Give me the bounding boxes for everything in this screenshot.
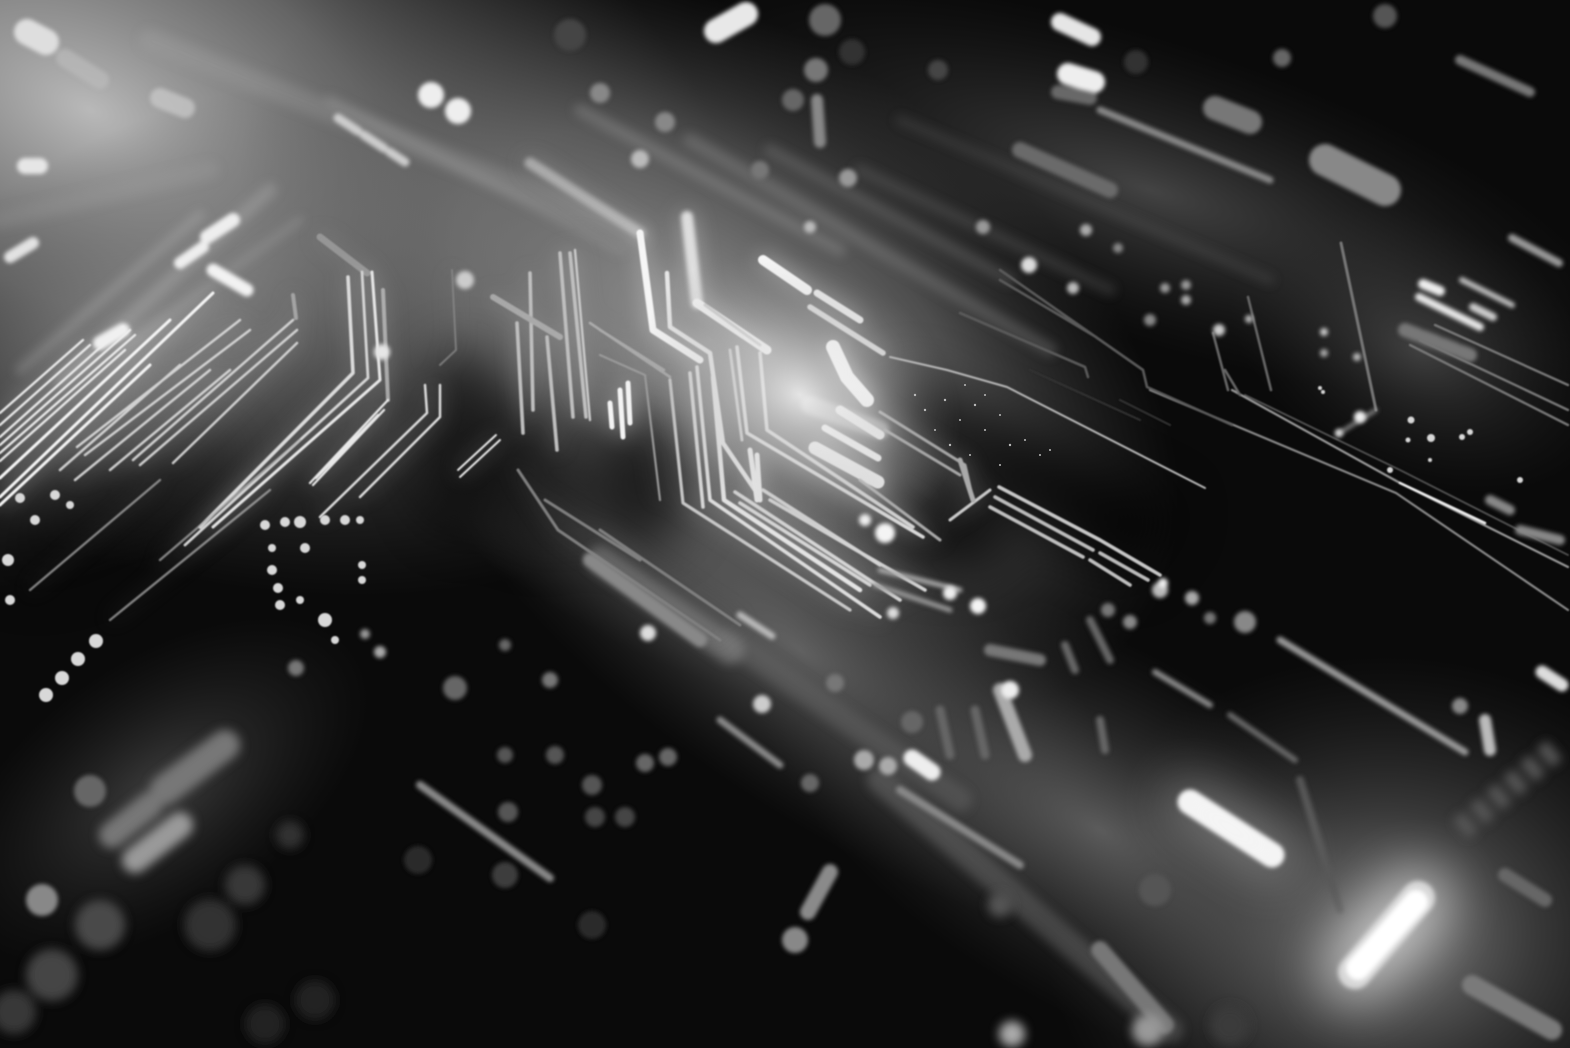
dark board shadows (0, 350, 1180, 610)
fine speckle dust near centre-right (914, 384, 1051, 466)
soft diagonal streaks upper-left and top (0, 40, 1270, 1030)
central circuit traces (493, 163, 990, 640)
hero light capsule bottom right (1355, 898, 1418, 972)
soft foreground bokeh bottom-left (0, 731, 335, 1044)
bloom around the traces (0, 163, 990, 640)
small led dots (2, 386, 1523, 702)
capsule glow bottom right middle (1190, 802, 1272, 855)
left circuit traces (0, 237, 500, 620)
soft foreground bokeh bottom-right (988, 745, 1560, 1047)
right long diagonal traces (890, 243, 1568, 610)
